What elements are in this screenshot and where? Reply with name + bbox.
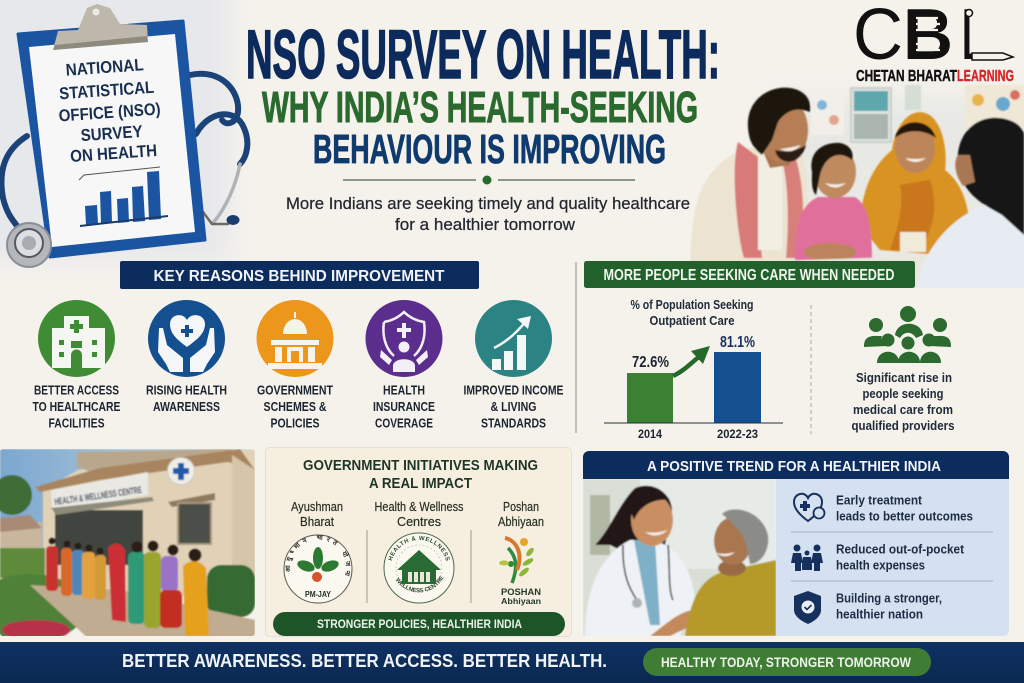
patient: [685, 509, 776, 636]
bar chart: outpatient care: [604, 297, 783, 441]
clipboard title: STATISTICAL: [59, 78, 155, 103]
wall posters and cabinet: [811, 85, 1024, 142]
label: government schemes: POLICIES: [270, 416, 320, 430]
panel: government initiatives: [265, 447, 572, 637]
title divider: [343, 176, 635, 184]
year: 2014: 2014: [638, 427, 662, 441]
heading: more people seeking care: MORE PEOPLE SEEKING CARE WHEN NEEDED: [604, 267, 894, 284]
logo: health and wellness centres: HEALTH & WELLNESS: [388, 536, 450, 561]
axis: [604, 422, 783, 424]
icon: shield with check: [794, 591, 821, 624]
subtitle: More Indians are seeking timely and quality healthcare: [286, 194, 690, 213]
clipboard metal clip: [53, 4, 148, 50]
panel heading: [583, 451, 1009, 479]
text: reduced expenses: [836, 542, 965, 572]
label: health insurance coverage: HEALTH: [383, 382, 425, 398]
label: better access: TO HEALTHCARE: [32, 399, 121, 414]
clipboard title: ON HEALTH: [70, 141, 158, 166]
label: rising health awareness: RISING HEALTH: [146, 382, 227, 398]
clipboard paper: [29, 34, 195, 247]
text: significant rise: [852, 370, 954, 433]
text: significant rise: medical care from: [853, 402, 953, 417]
logo letters: [853, 0, 1013, 75]
clipboard title: SURVEY: [80, 122, 144, 145]
panel background: [776, 479, 1009, 636]
icon: stethoscope chest piece: [7, 223, 51, 267]
clipboard board: [18, 21, 205, 257]
footer pill: HEALTHY TODAY, STRONGER TOMORROW: [661, 655, 911, 670]
label: government schemes: GOVERNMENT: [257, 382, 333, 398]
label: health insurance coverage: [373, 382, 435, 430]
text: stronger nation: Building a stronger,: [836, 590, 942, 606]
subtitle: [286, 194, 690, 234]
label: better access: [32, 382, 121, 430]
logo: poshan abhiyaan: [499, 538, 541, 606]
icon: government building: [256, 300, 334, 377]
label: better access: FACILITIES: [48, 416, 105, 430]
logo: Chetan Bharat Learning: [853, 0, 1014, 85]
label: poshan abhiyaan: Abhiyaan: [498, 515, 544, 529]
title: WHY INDIA’S HEALTH-SEEKING: [262, 83, 698, 132]
clinic building: [35, 449, 255, 600]
panel heading: A POSITIVE TREND FOR A HEALTHIER INDIA: [647, 458, 941, 475]
man: [690, 86, 812, 261]
text: reduced expenses: health expenses: [836, 558, 925, 572]
logo: PM-JAY: [284, 534, 352, 604]
table: [791, 256, 924, 283]
sign text: HEALTH & WELLNESS CENTRE: [54, 485, 143, 508]
bushes: [0, 548, 255, 642]
label: improved income: [464, 382, 564, 430]
chart title: Outpatient Care: [650, 313, 734, 328]
footer band: [0, 642, 1024, 683]
icon: stethoscope tubing: [1, 74, 247, 232]
photo: family at clinic: [690, 84, 1024, 288]
text: early treatment: Early treatment: [836, 492, 923, 508]
label: better access: BETTER ACCESS: [34, 382, 119, 398]
label: improved income: STANDARDS: [481, 416, 546, 430]
label: ayushman bharat: Bharat: [300, 515, 334, 529]
clipboard title: [58, 55, 161, 166]
label: health and wellness centres: [374, 500, 464, 529]
logo: poshan abhiyaan: Abhiyaan: [501, 597, 541, 606]
heading: key reasons: KEY REASONS BEHIND IMPROVEMENT: [154, 268, 445, 285]
label: poshan abhiyaan: Poshan: [503, 500, 539, 514]
icon: group of people: [864, 306, 951, 363]
title: BEHAVIOUR IS IMPROVING: [313, 126, 666, 172]
panel background: [266, 448, 572, 636]
heading: key reasons: [120, 261, 479, 289]
panel heading: A REAL IMPACT: [369, 475, 472, 492]
logo: PM-JAY: PM-JAY: [305, 590, 332, 599]
icon: insurance shield: [366, 300, 442, 377]
label: health insurance coverage: INSURANCE: [373, 399, 435, 414]
chart title: [630, 297, 754, 328]
doctor from behind: [900, 118, 1024, 290]
text: early treatment: leads to better outcomes: [836, 508, 973, 524]
logo: health and wellness centres: WELLNESS CENTRES: [396, 576, 444, 592]
label: improved income: & LIVING: [490, 399, 536, 414]
value: 81.1%: 81.1%: [720, 334, 755, 351]
green strap line: [273, 612, 565, 636]
panel heading: [303, 457, 538, 492]
year: 2022-23: 2022-23: [717, 427, 758, 441]
green strap line: STRONGER POLICIES, HEALTHIER INDIA: [317, 617, 522, 631]
vertical divider: [575, 262, 577, 433]
clipboard backdrop: [0, 0, 230, 260]
trees and neighbouring house: [0, 475, 42, 552]
label: health and wellness centres: Centres: [397, 515, 441, 529]
logo: PM-JAY: आयुष्मान भारत योजना: [286, 535, 350, 576]
bar: 2014: [627, 373, 673, 423]
woman: [860, 112, 969, 255]
text: reduced expenses: Reduced out-of-pocket: [836, 542, 965, 556]
footer pill: [643, 648, 931, 676]
text: significant rise: qualified providers: [852, 418, 954, 433]
logo wordmark: CHETAN BHARAT: [856, 68, 957, 85]
label: improved income: IMPROVED INCOME: [464, 382, 564, 398]
icon: hospital: [38, 300, 115, 377]
icon: heart in hands: [148, 300, 225, 377]
subtitle: for a healthier tomorrow: [395, 215, 576, 234]
icon: rising income chart: [475, 300, 552, 377]
title: [246, 16, 720, 172]
dashed divider: [810, 305, 812, 434]
text: early treatment: [836, 492, 973, 524]
bar: 2022-23: [714, 352, 761, 423]
heading: more people seeking care: [584, 261, 915, 288]
clipboard mini bar chart: [79, 167, 168, 226]
label: poshan abhiyaan: [498, 500, 544, 529]
panel heading: GOVERNMENT INITIATIVES MAKING: [303, 457, 538, 474]
arrow: increase: [673, 346, 710, 376]
path: [30, 585, 255, 640]
label: rising health awareness: AWARENESS: [153, 399, 220, 414]
photo: doctor with patient: [583, 479, 776, 636]
text: stronger nation: [836, 590, 942, 622]
doctor: [585, 486, 695, 636]
label: government schemes: SCHEMES &: [264, 399, 326, 414]
queue of people: [46, 538, 209, 636]
label: health and wellness centres: Health & Wellness: [374, 500, 464, 514]
text: significant rise: Significant rise in: [856, 370, 952, 385]
clipboard: [18, 4, 205, 257]
panel: key reasons: [32, 300, 564, 430]
text: significant rise: people seeking: [862, 386, 944, 401]
logo: health and wellness centres: [384, 532, 454, 604]
label: rising health awareness: [146, 382, 227, 414]
clipboard title: OFFICE (NSO): [58, 99, 161, 126]
girl: [795, 143, 872, 262]
value: 72.6%: 72.6%: [632, 354, 669, 371]
footer slogan: BETTER AWARENESS. BETTER ACCESS. BETTER HEALTH.: [122, 651, 607, 671]
clipboard title: NATIONAL: [65, 55, 144, 80]
icon: heart with cross: [794, 494, 824, 521]
photo: health and wellness centre: [0, 449, 255, 642]
logo: poshan abhiyaan: POSHAN: [501, 587, 541, 597]
label: health insurance coverage: COVERAGE: [375, 416, 433, 430]
chart title: % of Population Seeking: [630, 297, 754, 312]
icon: family: [791, 544, 823, 571]
label: ayushman bharat: [291, 500, 343, 529]
label: ayushman bharat: Ayushman: [291, 500, 343, 514]
text: stronger nation: healthier nation: [836, 606, 923, 622]
panel: positive trend: [583, 451, 1009, 636]
label: government schemes: [257, 382, 333, 430]
